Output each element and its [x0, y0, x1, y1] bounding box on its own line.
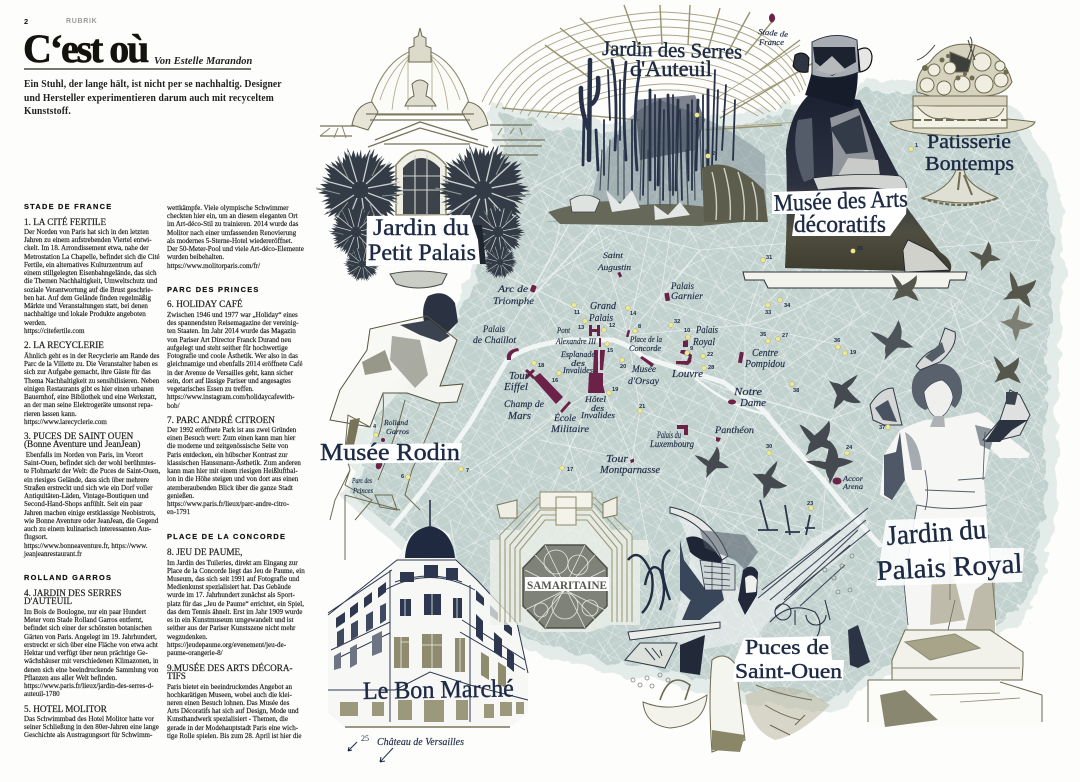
map place names: d'Orsay: [628, 377, 660, 387]
entry text 3: https://www.bonneaventure.fr, https://www.: [24, 542, 147, 550]
intro text: Ein Stuhl, der lange hält, ist nicht per se nachhaltig. Designer: [24, 78, 282, 90]
entry text 7: klassischen Haussmann-Ästhetik. Zum anderen: [167, 459, 301, 467]
entry text 8: https://jeudepaume.org/evenement/jeu-de-: [167, 641, 286, 649]
numbered location pins: 14: [630, 311, 637, 317]
map place names: Arena: [842, 482, 863, 491]
entry text 9: tige Rolle spielen. Bis zum 28. April ist hier die: [167, 732, 301, 740]
entry text 1: soziale Verantwortung auf die Brust geschrie-: [24, 286, 153, 294]
large title labels: Le Bon Marché: [363, 675, 514, 705]
entry text 4: erstreckt er sich über eine Fläche von etwa acht: [24, 641, 158, 649]
numbered location pins: 19: [850, 350, 856, 356]
entry text 4: wächshäuser mit verschiedenen Klimazonen, in: [24, 657, 158, 665]
entry text 9: hochkarätigen Museen, wobei auch die klei-: [167, 691, 292, 699]
numbered location pins: 1: [915, 143, 918, 149]
entry text 8: seither aus der Pariser Kunstszene nicht mehr: [167, 624, 295, 632]
numbered location pins: 17: [567, 467, 573, 473]
entry text 2: https://www.larecyclerie.com: [24, 418, 107, 426]
heading: Place de la Concorde: PLACE DE LA CONCORDE: [167, 532, 286, 541]
map place names: de Chaillot: [473, 336, 516, 346]
entry text 2: rieren lassen kann.: [24, 410, 77, 418]
map wash background: [342, 76, 1064, 712]
entry text 9: Arts Décoratifs hat sich auf Design, Mode und: [167, 707, 299, 715]
entry text 1: einem stillgelegten Eisenbahngelände, das sich: [24, 269, 156, 277]
entry text 4: befindet sich einer der schönsten botanischen: [24, 624, 152, 632]
greenhouse arches: [482, 5, 818, 130]
entry text 5 continued: wettkämpfe. Viele olympische Schwimmer: [167, 204, 289, 212]
entry text 1: https://citefertile.com: [24, 327, 84, 335]
entry text 7: https://www.paris.fr/lieux/parc-andre-citro-: [167, 500, 289, 508]
map place names: France: [758, 38, 784, 47]
entry text 1: die Themen Nachhaltigkeit, Umweltschutz und: [24, 277, 157, 285]
entry heading 4: [24, 588, 122, 606]
entry text 4: Im Bois de Boulogne, nur ein paar Hundert: [24, 608, 146, 616]
entry text 6: Zwischen 1946 und 1977 war „Holiday“ eines: [167, 311, 298, 319]
entry text 1: Fertile, ein alternatives Kulturzentrum auf: [24, 261, 143, 269]
map place names: Concorde: [629, 344, 661, 353]
heading: Parc des Princes: PARC DES PRINCES: [167, 285, 260, 294]
map place names: Princes: [352, 486, 373, 495]
numbered location pins: 34: [784, 303, 791, 309]
entry text 8: [166, 558, 305, 657]
large title labels: Jardin du: [885, 514, 987, 552]
map place names: Centre: [752, 348, 779, 359]
entry text 2: an der man seine Elektrogeräte umsonst repa-: [24, 401, 153, 409]
numbered location pins: 9: [690, 346, 693, 352]
numbered location pins: 33: [765, 310, 771, 316]
map place names: Place de la: [629, 335, 662, 344]
entry text 8: das dem Tennis ähnelt. Erst im Jahr 1909 wurde: [167, 608, 302, 616]
map place names: Stade de: [758, 27, 789, 39]
entry heading 7: 7. PARC ANDRÉ CITROEN: [167, 415, 275, 425]
entry text 3: Jahren machen einige erstklassige Neobistrots,: [24, 509, 156, 517]
entry text 4: denen sich eine beeindruckende Sammlung von: [24, 666, 158, 674]
monument: Thinker sculpture: [330, 293, 463, 560]
entry text 1: ben hat. Auf dem Gelände finden regelmäßig: [24, 294, 151, 302]
large title labels: Jardin des Serres: [602, 36, 742, 64]
monument: Bon Marché: [328, 500, 528, 727]
map place names: Pont: [556, 326, 571, 335]
entry text 3: Saint-Ouen, befindet sich der wohl berühmtes-: [24, 459, 156, 467]
numbered location pins: 8: [638, 324, 641, 330]
entry text 4: Pflanzen aus aller Welt befinden.: [24, 674, 117, 682]
entry text 8: Place de la Concorde liegt das Jeu de Paume, ein: [167, 567, 305, 575]
map place names: Champ de: [504, 400, 544, 410]
illustrated map of Paris: [316, 4, 1068, 762]
map place names: Garros: [386, 427, 409, 436]
numbered location pins: 3: [695, 120, 698, 126]
numbered location pins: 13: [578, 325, 584, 331]
entry text 1: [24, 228, 160, 335]
title: C‘est où: [23, 26, 147, 71]
monument: Patisserie cake: [890, 37, 1035, 205]
entry heading 3: (Bonne Aventure und JeanJean): [24, 439, 140, 449]
map place names: Notre: [733, 387, 762, 398]
large title labels: d'Auteuil: [630, 56, 712, 81]
map place names: Palais: [588, 313, 613, 324]
map place names: Dame: [739, 398, 766, 409]
entry text 6: [166, 311, 302, 410]
numbered location pins: 19: [612, 387, 618, 393]
numbered location pins: 22: [707, 352, 713, 358]
entry text 6: des spannendsten Reisemagazine der vereinig-: [167, 319, 298, 327]
entry text 1: ckelt. Im 18. Arrondissement etwa, nahe der: [24, 244, 149, 252]
map place names: Tour: [509, 371, 529, 382]
large title labels: Jardin du: [373, 215, 470, 240]
title rule: [24, 68, 251, 70]
entry text 4: Gärten von Paris. Angelegt im 19. Jahrhundert,: [24, 633, 157, 641]
map place names: Augustin: [597, 262, 631, 272]
map place names: Alexandre III: [555, 337, 596, 346]
section label: RUBRIK: [66, 18, 97, 25]
entry text 6: in der Avenue de Versailles geht, kann sicher: [167, 369, 293, 377]
landmarks on the map: [375, 14, 842, 484]
entry text 7: einen Besuch wert: Zum einen kann man hier: [167, 434, 295, 442]
entry heading 8: 8. JEU DE PAUME,: [167, 547, 242, 557]
numbered location pins: 35: [760, 332, 766, 338]
numbered location pins: 5: [396, 452, 399, 458]
entry heading 4: 4. JARDIN DES SERRES: [24, 588, 122, 598]
entry text 5 continued: [166, 204, 304, 270]
entry text 3: Ebenfalls im Norden von Paris, im Vorort: [26, 451, 143, 459]
entry text 4: auteuil-1780: [24, 690, 60, 698]
entry text 3: wie Bonne Aventure oder JeanJean, die Gegend: [24, 517, 158, 525]
map place names: Hôtel: [584, 394, 607, 404]
map place names: Arc de: [497, 285, 528, 295]
byline: Von Estelle Marandon: [154, 56, 252, 67]
monument: monkey sculpture: [743, 35, 967, 288]
entry text 7: die moderne und zeitgenössische Seite von: [167, 442, 288, 450]
entry text 9: Paris bietet ein beeindruckendes Angebot an: [167, 682, 292, 690]
large title labels: Musée Rodin: [320, 440, 460, 466]
entry text 1: Der Norden von Paris hat sich in den letzten: [24, 228, 149, 236]
map place names: Garnier: [671, 292, 703, 302]
birds: [694, 240, 1042, 500]
arrow to Château de Versailles: 25: [361, 734, 369, 743]
entry heading 9: TIFS: [167, 670, 186, 680]
intro text: Kunststoff.: [24, 105, 71, 117]
entry text 1: werden.: [24, 319, 46, 327]
map place names: Palais du: [656, 430, 681, 440]
entry text 6: ten Staaten. Im Jahr 2014 wurde das Magazin: [167, 327, 296, 335]
large title labels: Saint-Ouen: [735, 659, 843, 683]
entry text 2: Bauernhof, eine Bibliothek und eine Werkstatt,: [24, 393, 157, 401]
large title labels: Bontemps: [925, 153, 1014, 175]
entry text 2: Parc de la Villette zu. Die Veranstalter haben es: [24, 360, 158, 368]
entry text 3: Antiquitäten-Läden, Vintage-Boutiquen und: [24, 492, 149, 500]
entry text 4: Meter vom Stade Rolland Garros entfernt,: [24, 616, 143, 624]
entry text 5: seiner Schließung in den 80er-Jahren eine lange: [24, 723, 159, 731]
map place names: Montparnasse: [599, 465, 661, 476]
map place names: des: [591, 403, 605, 413]
entry text 5 continued: wurden beibehalten.: [167, 253, 224, 261]
map place names: [351, 27, 863, 495]
entry text 7: kann man hier mit einem riesigen Heißluftbal-: [167, 467, 298, 475]
monument: Petit Palais: [316, 28, 545, 288]
entry text 8: wegzudenken.: [167, 633, 208, 641]
entry text 7: Paris entdecken, ein hübscher Kontrast zur: [167, 451, 288, 459]
map place names: Palais: [695, 325, 718, 336]
map place names: Musée: [631, 364, 656, 374]
entry text 2: sich zur Aufgabe gemacht, ihre Gäste für das: [24, 368, 151, 376]
numbered location pins: 15: [607, 348, 613, 354]
entry heading 9: [167, 662, 293, 680]
entry heading 4: D'AUTEUIL: [24, 596, 72, 606]
map place names: Louvre: [671, 369, 704, 380]
entry text 2: [24, 352, 160, 426]
entry text 3: Straßen erstreckt und sich wie ein Dorf voller: [24, 484, 153, 492]
entry text 7: lon in die Höhe steigen und von dort aus einen: [167, 475, 298, 483]
numbered location pins: 16: [552, 378, 558, 384]
map place names: Parc des: [351, 476, 372, 485]
entry text 5 continued: als modernes 5-Sterne-Hotel wiedereröffnet.: [167, 237, 292, 245]
map place names: Luxembourg: [649, 439, 694, 449]
map place names: Esplanade: [560, 349, 595, 359]
entry text 6: https://www.instagram.com/holidaycafewith-: [167, 393, 295, 401]
monument: Puces de Saint-Ouen objects: [625, 500, 870, 752]
entry text 9: neren einen Besuch lohnen. Das Musée des: [167, 699, 289, 707]
entry text 6: bob/: [167, 402, 180, 410]
entry text 3: te Flohmarkt der Welt: die Puces de Saint-Ouen,: [24, 467, 160, 475]
numbered location pins: 12: [609, 323, 615, 329]
entry heading 2: 2. LA RECYCLERIE: [24, 340, 104, 350]
entry text 7: Der 1992 eröffnete Park ist aus zwei Gründen: [167, 426, 296, 434]
entry text 5 continued: Der 50-Meter-Pool und viele Art-déco-Elemente: [167, 245, 304, 253]
numbered location pins: [373, 113, 918, 510]
arrow to Château de Versailles: [348, 734, 464, 762]
map place names: Palais: [670, 282, 694, 292]
entry text 4: https://www.paris.fr/lieux/jardin-des-serres-d-: [24, 682, 153, 690]
monument: statue with pigeons: [868, 328, 1042, 727]
entry text 8: Museum, das sich seit 1991 auf Fotografie und: [167, 575, 299, 583]
entry text 5 continued: Molitor nach einer umfassenden Renovierung: [167, 229, 296, 237]
entry text 9: Kunsthandwerk spezialisiert - Themen, die: [167, 715, 288, 723]
entry text 8: wurde im 17. Jahrhundert zunächst als Sport-: [167, 591, 295, 599]
map place names: Triomphe: [493, 297, 534, 307]
map place names: Panthéon: [714, 426, 754, 436]
large title labels: Palais Royal: [876, 548, 1023, 587]
entry text 2: Thema Nachhaltigkeit zu sensibilisieren. Neben: [24, 377, 159, 385]
entry text 2: Ähnlich geht es in der Recyclerie am Rande des: [24, 352, 159, 360]
large title labels: Musée des Arts: [773, 186, 908, 217]
entry text 7: genießen.: [167, 492, 194, 500]
entry heading 3: [24, 431, 140, 450]
large title labels: Petit Palais: [368, 240, 476, 265]
map place names: Eiffel: [503, 382, 528, 393]
map place names: Rolland: [383, 418, 408, 427]
intro text: und Hersteller experimentieren darum auch mit recyceltem: [24, 92, 274, 104]
numbered location pins: 27: [782, 333, 788, 339]
entry heading 1: 1. LA CITÉ FERTILE: [24, 217, 106, 227]
article column 1: [24, 202, 160, 739]
entry text 4: Hektar und verfügt über neun prächtige Ge-: [24, 649, 148, 657]
map place names: Mars: [507, 411, 531, 422]
entry heading 3: 3. PUCES DE SAINT OUEN: [24, 431, 133, 441]
entry text 5: Das Schwimmbad des Hotel Molitor hatte vor: [24, 715, 154, 723]
street network: [353, 90, 1052, 700]
arrow to Château de Versailles: Château de Versailles: [377, 737, 464, 748]
entry text 6: Fotografie und coole Ästhetik. Wer also in das: [167, 352, 298, 360]
entry text 1: Metrostation La Chapelle, befindet sich die Cité: [24, 253, 160, 261]
numbered location pins: 11: [574, 310, 580, 316]
entry text 7: [167, 426, 301, 516]
numbered location pins: 21: [639, 404, 645, 410]
large title labels: SAMARITAINE: [527, 580, 607, 592]
entry text 3: auch zu einem kulinarisch interessanten Aus-: [24, 525, 151, 533]
entry text 8: platz für das „Jeu de Paume“ errichtet, ein Spiel,: [167, 600, 304, 608]
numbered location pins: 2: [712, 151, 715, 157]
numbered location pins: 10: [684, 328, 690, 334]
numbered location pins: 7: [466, 468, 469, 474]
entry text 6: aufgelegt und steht seither für hochwertige: [167, 344, 288, 352]
numbered location pins: 18: [538, 363, 544, 369]
entry text 5 continued: im Art-déco-Stil zu trainieren. 2014 wurde das: [167, 220, 298, 228]
heading: Stade de France: STADE DE FRANCE: [24, 202, 112, 211]
large title labels: [320, 36, 1024, 705]
entry text 3: flugsort.: [24, 533, 48, 541]
numbered location pins: 20: [620, 364, 626, 370]
entry text 1: Jahren zu einem aufstrebenden Viertel entwi-: [24, 236, 152, 244]
numbered location pins: 4: [373, 424, 377, 430]
map place names: Saint: [603, 250, 624, 260]
intro text: [24, 78, 282, 117]
entry text 8: Medienkunst spezialisiert hat. Das Gebäude: [167, 583, 291, 591]
entry heading 9: 9.MUSÉE DES ARTS DÉCORA-: [167, 662, 293, 672]
entry text 8: Im Jardin des Tuileries, direkt am Eingang zur: [167, 558, 298, 566]
numbered location pins: 38: [793, 388, 799, 394]
entry text 2: einigen Restaurants gibt es hier einen urbanen: [24, 385, 154, 393]
entry text 7: en-1791: [167, 508, 190, 516]
large title labels: décoratifs: [794, 212, 886, 238]
large title labels: Patisserie: [927, 131, 1011, 153]
entry text 5: [24, 715, 159, 739]
map place names: Grand: [590, 301, 617, 312]
entry text 8: paume-orangerie-8/: [167, 649, 223, 657]
entry text 5: Geschichte als Austragungsort für Schwimm-: [24, 731, 152, 739]
monument: cacti of the Serres d'Auteuil: [545, 60, 768, 226]
entry text 3: Second-Hand-Shops anfühlt. Seit ein paar: [24, 500, 142, 508]
map place names: Militaire: [550, 425, 589, 435]
numbered location pins: 37: [879, 425, 885, 431]
map place names: Invalides: [580, 410, 616, 420]
numbered location pins: 6: [401, 474, 404, 480]
large title labels: Puces de: [745, 635, 829, 659]
entry text 6: von Pariser Art Director Franck Durand neu: [167, 336, 291, 344]
entry text 1: Märkte und Veranstaltungen statt, bei denen: [24, 302, 148, 310]
entry text 5 continued: checkten hier ein, um an diesem eleganten Ort: [167, 212, 298, 220]
map place names: Accor: [842, 474, 863, 483]
numbered location pins: 36: [834, 338, 840, 344]
numbered location pins: 26: [857, 246, 863, 252]
entry text 9: gerade in der Modehauptstadt Paris eine wich-: [167, 724, 298, 732]
entry text 6: vegetarisches Essen zu treffen.: [167, 385, 254, 393]
numbered location pins: 32: [674, 319, 680, 325]
entry text 5 continued: https://www.molitorparis.com/fr/: [167, 262, 260, 270]
entry text 8: es in ein Kunstmuseum umgewandelt und ist: [167, 616, 293, 624]
numbered location pins: 30: [766, 444, 772, 450]
entry text 4: [24, 608, 158, 698]
article column 2: [166, 204, 305, 740]
map place names: École: [553, 412, 576, 424]
entry text 7: atemberaubenden Blick über die ganze Stadt: [167, 484, 293, 492]
entry heading 6: 6. HOLIDAY CAFÉ: [167, 299, 243, 309]
river Seine: [378, 340, 880, 545]
entry text 6: gleichnamige und ebenfalls 2014 eröffnete Café: [167, 360, 302, 368]
entry heading 5: 5. HOTEL MOLITOR: [24, 704, 107, 714]
monument: Samaritaine: [478, 492, 648, 632]
map place names: Pompidou: [744, 359, 785, 370]
map place names: Tour: [606, 454, 628, 465]
heading: Rolland Garros: ROLLAND GARROS: [24, 573, 112, 582]
map place names: Royal: [692, 337, 715, 348]
entry text 1: nachhaltige und lokale Produkte angeboten: [24, 310, 146, 318]
entry text 9: [167, 682, 302, 740]
entry text 3: ein riesiges Gelände, dass sich über mehrere: [24, 476, 149, 484]
entry text 6: sein, dort auf lässige Pariser und angesagtes: [167, 377, 291, 385]
page number: 2: [24, 17, 28, 26]
numbered location pins: 28: [708, 365, 714, 371]
map place names: des: [571, 358, 586, 368]
entry text 3: jeanjeanrestaurant.fr: [24, 550, 82, 558]
numbered location pins: 23: [807, 501, 813, 507]
entry text 3: [24, 451, 160, 558]
map place names: Palais: [482, 325, 505, 335]
numbered location pins: 24: [846, 445, 853, 451]
map place names: Invalides: [562, 365, 594, 375]
numbered location pins: 31: [766, 255, 772, 261]
